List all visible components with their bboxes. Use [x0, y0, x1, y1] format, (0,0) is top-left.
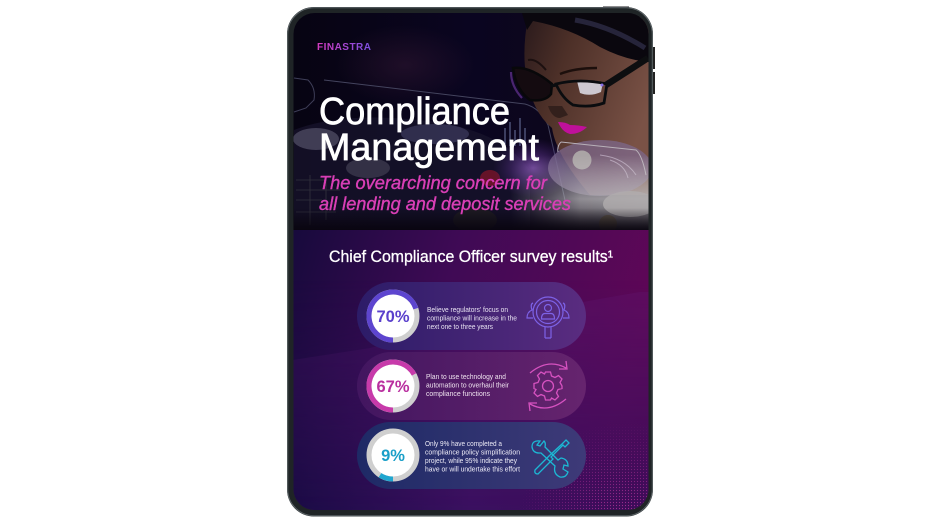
- donut chart: 70%: 70%: [376, 308, 410, 326]
- photo: glowing tablet and hand: [293, 138, 657, 235]
- description: [427, 305, 517, 331]
- description: [426, 372, 510, 398]
- description: Plan to use technology and: [426, 372, 506, 381]
- description: automation to overhaul their: [426, 380, 510, 390]
- donut chart: 9%: [369, 431, 417, 479]
- description: have or will undertake this effort: [425, 464, 520, 474]
- description: Only 9% have completed a: [425, 439, 502, 448]
- title: Management: [319, 127, 539, 169]
- icon: magnifier over person: [527, 297, 569, 338]
- photo: woman's face: [522, 13, 649, 195]
- logo: Finastra: FINASTRA: [317, 42, 371, 53]
- subtitle: The overarching concern for: [319, 172, 548, 193]
- hero photo panel: [293, 13, 657, 235]
- panel: 9% stat: [357, 422, 586, 489]
- photo: magenta lips: [558, 122, 587, 134]
- icon: wrench and screwdriver: [532, 440, 569, 477]
- description: compliance will increase in the: [427, 314, 517, 322]
- title: [319, 91, 539, 169]
- photo: glasses: [511, 58, 648, 106]
- title: Compliance: [319, 91, 510, 133]
- survey panel background: [293, 230, 650, 512]
- donut chart: 67%: [369, 362, 417, 410]
- section heading: Chief Compliance Officer survey results¹: [329, 247, 613, 266]
- subtitle: [319, 172, 571, 214]
- description: compliance functions: [426, 389, 490, 398]
- donut chart: 9%: 9%: [381, 447, 405, 465]
- tablet device frame: [287, 6, 655, 516]
- description: [425, 439, 520, 474]
- donut chart: 70%: [369, 292, 417, 340]
- description: project, while 95% indicate they: [425, 456, 517, 465]
- hologram interface and world map: [293, 78, 565, 232]
- panel: 70% stat: [357, 282, 586, 350]
- panel: 67% stat: [357, 352, 586, 420]
- icon: gear with cycle arrows: [529, 361, 567, 411]
- description: next one to three years: [427, 322, 493, 331]
- tablet infographic: [287, 6, 655, 516]
- donut chart: 67%: 67%: [376, 378, 410, 396]
- description: Believe regulators’ focus on: [427, 305, 508, 314]
- subtitle: all lending and deposit services: [319, 193, 571, 214]
- description: compliance policy simplification: [425, 448, 520, 456]
